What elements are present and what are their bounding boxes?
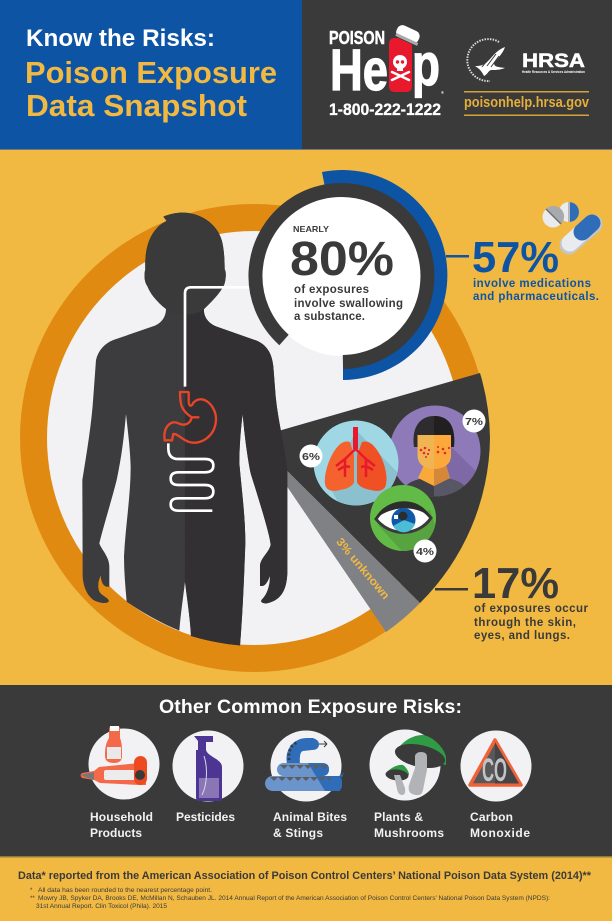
footer: data source: Data* reported from the American Association of Poison Control Centers’ National Poison Data System (2014)** (18, 870, 592, 882)
icon: stomach (164, 392, 216, 443)
panel: other common exposure risks (0, 685, 612, 856)
wedge: 17 percent skin eyes lungs (254, 373, 490, 603)
heading: other risks: Other Common Exposure Risks: (159, 696, 462, 718)
disc: white (262, 196, 422, 356)
callout: nearly 80 percent: a substance. (294, 311, 365, 323)
logo: Poison Help: 1-800-222-1222 (329, 100, 441, 119)
callout: nearly 80 percent: of exposures (294, 284, 369, 296)
badge: 7 percent (462, 410, 486, 432)
stat: 57 percent (472, 233, 599, 303)
footer: data source (18, 870, 592, 910)
stat: 57 percent: and pharmaceuticals. (473, 291, 599, 303)
label: carbon monoxide: Carbon (470, 810, 513, 824)
item: carbon monoxide (460, 730, 532, 802)
badge: 6 percent: 6% (302, 451, 321, 463)
badge: 4 percent: 4% (416, 546, 435, 558)
label: carbon monoxide (470, 810, 530, 840)
label: plants and mushrooms: Mushrooms (374, 826, 444, 840)
logo: Poison Help: POISON (329, 28, 385, 48)
footer: data source: Mowry JB, Spyker DA, Brooks DE, McMillan N, Schauben JL. 2014 Annual Report of the American Association of Poison Control Centers’ National Poison Data System (NPDS): (38, 896, 550, 902)
stat: 57 percent: 57% (472, 233, 559, 282)
label: household products (90, 810, 153, 840)
stat: 17 percent: eyes, and lungs. (474, 630, 570, 642)
head (144, 213, 226, 315)
callout: nearly 80 percent: NEARLY (293, 224, 329, 234)
heading: know the risks: Know the Risks: (26, 25, 215, 52)
disc: light centre (47, 231, 461, 645)
label: animal bites: & Stings (273, 826, 323, 840)
callout: nearly 80 percent (290, 224, 403, 323)
label: pesticides: Pesticides (176, 810, 235, 824)
logo: HRSA: Health Resources & Services Administration (522, 69, 585, 74)
icon: pills (542, 202, 593, 245)
item: plants and mushrooms (370, 730, 447, 800)
icon: poison bottle (389, 23, 422, 92)
stat: 17 percent (472, 559, 589, 642)
heading: poison exposure: Poison Exposure (25, 56, 277, 90)
heading: data snapshot: Data Snapshot (26, 89, 247, 123)
label: animal bites (273, 810, 347, 840)
badge: 6 percent (300, 444, 322, 468)
logo: HHS seal (467, 39, 505, 81)
item: carbon monoxide: CO (482, 752, 507, 788)
label: animal bites: Animal Bites (273, 810, 347, 824)
logo: Poison Help (329, 23, 444, 119)
connector: blue line (446, 255, 469, 258)
callout: nearly 80 percent: 80% (290, 233, 394, 286)
callout: nearly 80 percent: involve swallowing (294, 298, 403, 310)
item: household products (80, 726, 160, 800)
stat: 17 percent: 17% (472, 559, 559, 608)
logo: HRSA: HRSA (522, 50, 585, 72)
label: plants and mushrooms (374, 810, 444, 840)
label: household products: Household (90, 810, 153, 824)
ring: orange outer (20, 204, 488, 672)
icon: esophagus tube (185, 287, 252, 387)
stat: 57 percent: involve medications (473, 278, 591, 290)
website address: poisonhelp.hrsa.gov (464, 95, 589, 111)
header panel: title (0, 0, 302, 150)
wedge: 3 percent unknown: 3% unknown (333, 536, 391, 602)
connector: dark line (435, 588, 468, 590)
stat: 17 percent: through the skin, (474, 617, 576, 629)
item: pesticides (172, 730, 244, 802)
footer: data source: All data has been rounded to the nearest percentage point. (38, 888, 212, 894)
header panel: logos (302, 0, 612, 150)
footer: data source: ** (30, 896, 35, 902)
icon: lungs (314, 420, 400, 510)
label: household products: Products (90, 826, 142, 840)
ring: blue 57 percent (322, 170, 447, 380)
body silhouette (82, 213, 287, 645)
item: animal bites (265, 730, 343, 802)
wedge: 3 percent unknown (254, 438, 420, 632)
logo: Poison Help: He (330, 38, 388, 103)
logo: Poison Help: ® (441, 90, 444, 95)
badge: 4 percent (414, 540, 436, 562)
icon: eye (370, 485, 436, 551)
icon: face with rash (391, 406, 480, 496)
icon: intestines (168, 443, 213, 511)
chart: swallowing rings (255, 170, 447, 380)
footer: data source: * (30, 888, 33, 894)
main chart: exposure pie (20, 204, 490, 672)
label: carbon monoxide: Monoxide (470, 826, 530, 840)
badge: 7 percent: 7% (465, 416, 484, 428)
label: plants and mushrooms: Plants & (374, 810, 423, 824)
ring: dark 80 percent (255, 190, 427, 362)
logo: Poison Help: p (412, 32, 440, 98)
stat: 17 percent: of exposures occur (474, 603, 589, 615)
footer: data source: 31st Annual Report. Clin Toxicol (Phila). 2015 (36, 904, 168, 910)
